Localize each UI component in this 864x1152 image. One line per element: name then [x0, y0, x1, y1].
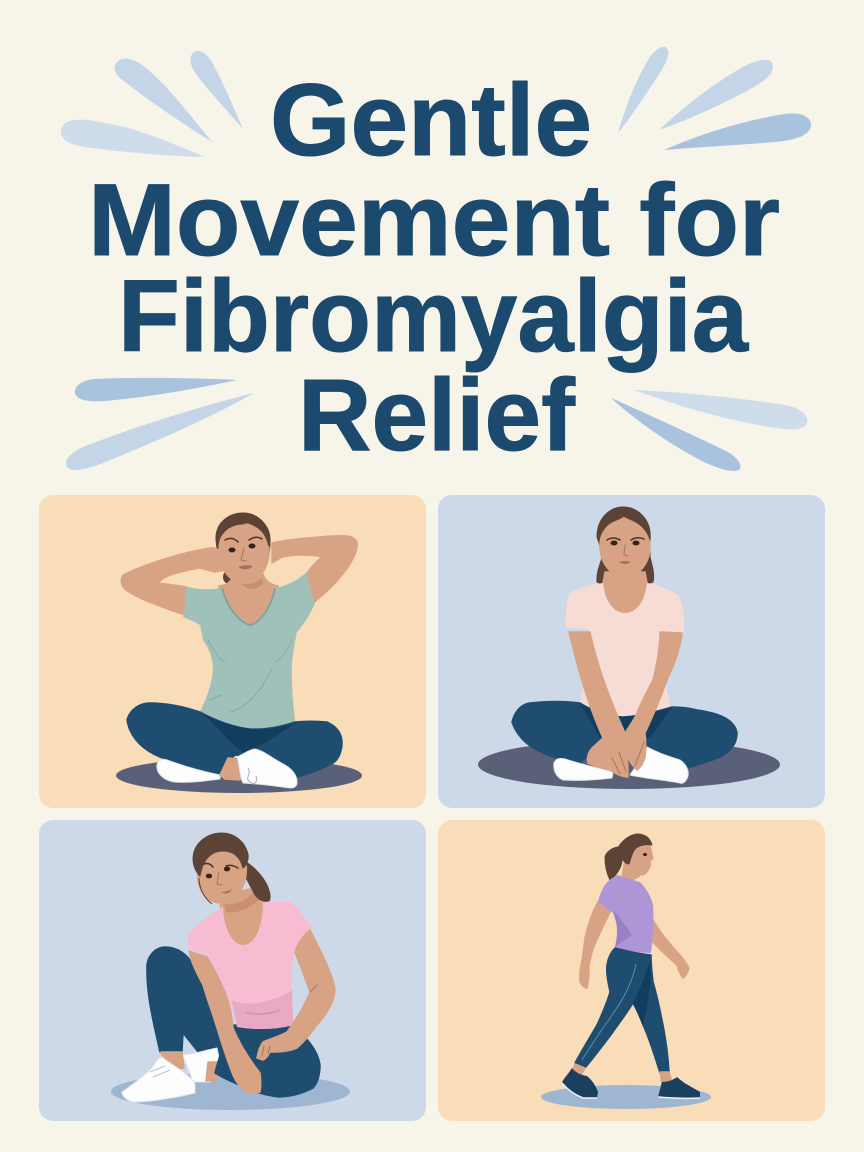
panel: seated side stretch	[39, 820, 426, 1121]
figure: walking woman in purple shirt	[562, 834, 700, 1098]
mat	[111, 1073, 350, 1110]
figure: seated woman in pale pink shirt	[512, 507, 737, 783]
mat	[541, 1085, 711, 1109]
decorative rays: top left	[61, 51, 243, 157]
decorative rays: bottom left	[66, 378, 254, 470]
decorative rays: top right	[618, 47, 811, 150]
title: Relief	[298, 358, 576, 472]
mat	[478, 740, 780, 789]
figure: seated woman in pink shirt	[122, 833, 335, 1102]
mat	[116, 758, 362, 793]
title: Fibromyalgia	[118, 259, 749, 373]
panel: seated butterfly stretch	[438, 495, 825, 808]
figure: seated woman in green shirt	[121, 513, 357, 788]
panel: seated neck stretch with hands behind head	[39, 495, 426, 808]
title: Gentle	[270, 63, 592, 177]
title	[88, 63, 780, 472]
panel: walking	[438, 820, 825, 1121]
decorative rays: bottom right	[611, 390, 807, 471]
title: Movement for	[88, 163, 780, 277]
